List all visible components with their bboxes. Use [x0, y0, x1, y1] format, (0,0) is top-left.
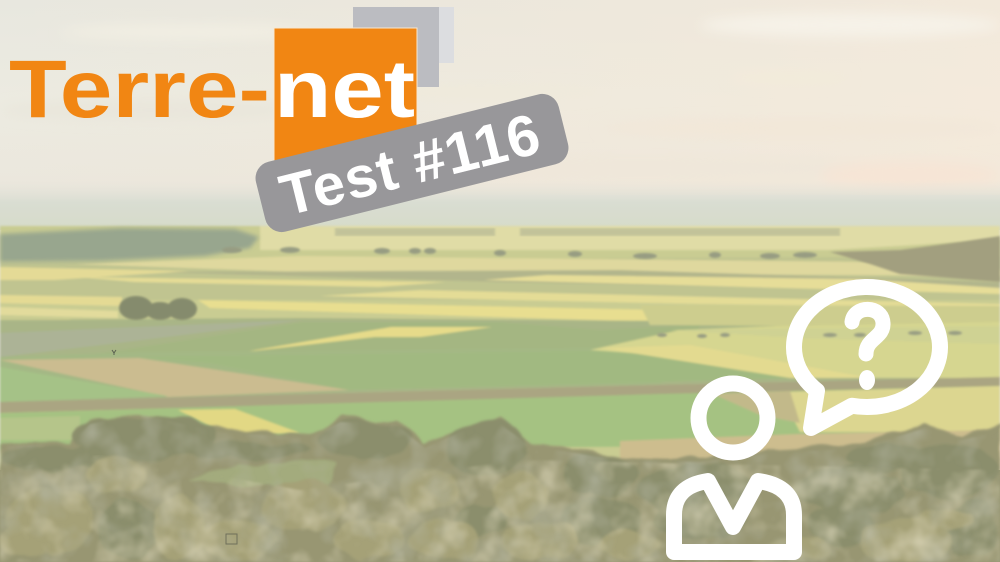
sky — [0, 0, 1000, 228]
farmland fields — [0, 226, 1000, 476]
forest shadow texture — [0, 414, 1000, 562]
icon: speech bubble — [794, 287, 940, 428]
badge label: Test #116 — [274, 101, 547, 229]
small mark in field — [112, 350, 116, 355]
logo word: net: net — [274, 44, 415, 135]
icon: person body — [674, 481, 794, 552]
logo word: Terre-: Terre- — [9, 44, 270, 135]
forest highlight texture — [0, 455, 1000, 562]
tree clump in the fields — [119, 296, 197, 320]
logo orange square — [274, 28, 417, 165]
icon: person with question speech bubble — [674, 287, 940, 552]
foreground forest — [0, 410, 1000, 562]
badge background — [252, 90, 572, 236]
small square mark — [226, 534, 237, 544]
icon: question mark — [852, 309, 883, 354]
distant horizon haze — [0, 180, 1000, 230]
logo grey squares — [353, 7, 454, 87]
distant tree lines — [0, 228, 1000, 338]
icon: question mark dot — [859, 370, 875, 390]
icon: person head — [698, 384, 768, 452]
logo: Terre-net — [9, 7, 454, 165]
badge: Test #116 — [252, 90, 572, 236]
